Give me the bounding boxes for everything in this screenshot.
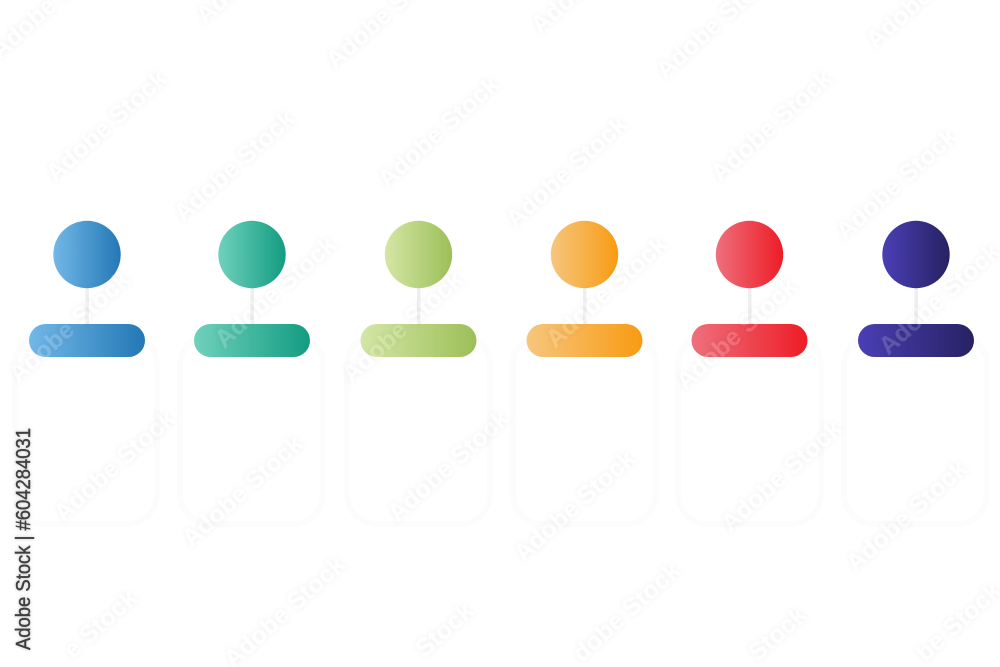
connector 6 bbox=[914, 288, 918, 325]
circle 5 bbox=[716, 221, 783, 288]
connector 3 bbox=[417, 288, 420, 325]
connector 4 bbox=[583, 288, 586, 325]
label pill 2 bbox=[194, 324, 310, 357]
text card 1 bbox=[15, 335, 157, 524]
panel: step 4 bbox=[513, 221, 656, 524]
circle 4 bbox=[551, 221, 618, 288]
panel: step 5 bbox=[678, 221, 821, 524]
label pill 5 bbox=[692, 324, 808, 357]
watermark pattern: Adobe Stock bbox=[373, 70, 505, 194]
text card 3 bbox=[347, 335, 490, 524]
watermark pattern: Adobe Stock bbox=[210, 230, 342, 354]
label pill 1 bbox=[29, 324, 145, 357]
watermark pattern: Adobe Stock bbox=[383, 404, 515, 528]
panel: step 2 bbox=[180, 221, 323, 524]
watermark pattern: Adobe Stock bbox=[541, 230, 673, 354]
text card 6 bbox=[844, 335, 987, 524]
circle 6 bbox=[882, 221, 950, 288]
watermark pattern: dobe Stock bbox=[567, 557, 686, 667]
watermark pattern: e Stock bbox=[58, 584, 143, 664]
watermark pattern: Adobe Stock bbox=[49, 404, 181, 528]
watermark pattern: Adobe Stock bbox=[831, 122, 963, 246]
watermark pattern: Adobe Stock bbox=[177, 429, 309, 553]
watermark pattern: Adobe Stock bbox=[716, 414, 848, 538]
connector 2 bbox=[250, 288, 254, 325]
stock credit text: Adobe Stock | #604284031 bbox=[13, 428, 35, 650]
watermark pattern: Adobe Stock bbox=[671, 272, 803, 396]
label pill 6 bbox=[858, 324, 974, 357]
watermark pattern: Adobe Stock bbox=[509, 444, 641, 568]
panel: step 6 bbox=[844, 221, 987, 524]
circle 2 bbox=[218, 221, 286, 288]
watermark pattern: Adobe Stock bbox=[41, 64, 173, 188]
text card 2 bbox=[180, 335, 323, 524]
watermark pattern: Stock bbox=[410, 597, 479, 663]
circle 3 bbox=[385, 221, 452, 288]
panel: step 3 bbox=[347, 221, 490, 524]
connector 1 bbox=[86, 288, 89, 325]
watermark pattern: Adobe Stock bbox=[841, 454, 973, 578]
label pill 4 bbox=[526, 324, 642, 357]
watermark pattern: Adobe Stock bbox=[501, 110, 633, 234]
text card 4 bbox=[513, 335, 656, 524]
label pill 3 bbox=[360, 324, 476, 357]
watermark pattern: Adobe Stock bbox=[4, 265, 136, 389]
circle 1 bbox=[53, 221, 121, 288]
panel: step 1 bbox=[15, 221, 157, 524]
watermark pattern: Stock bbox=[743, 601, 812, 667]
watermark pattern: Adobe Stock bbox=[169, 104, 301, 228]
text card 5 bbox=[678, 335, 821, 524]
watermark pattern: Adobe Stock bbox=[337, 265, 469, 389]
watermark pattern: Adobe Stock bbox=[706, 64, 838, 188]
connector 5 bbox=[748, 288, 752, 325]
